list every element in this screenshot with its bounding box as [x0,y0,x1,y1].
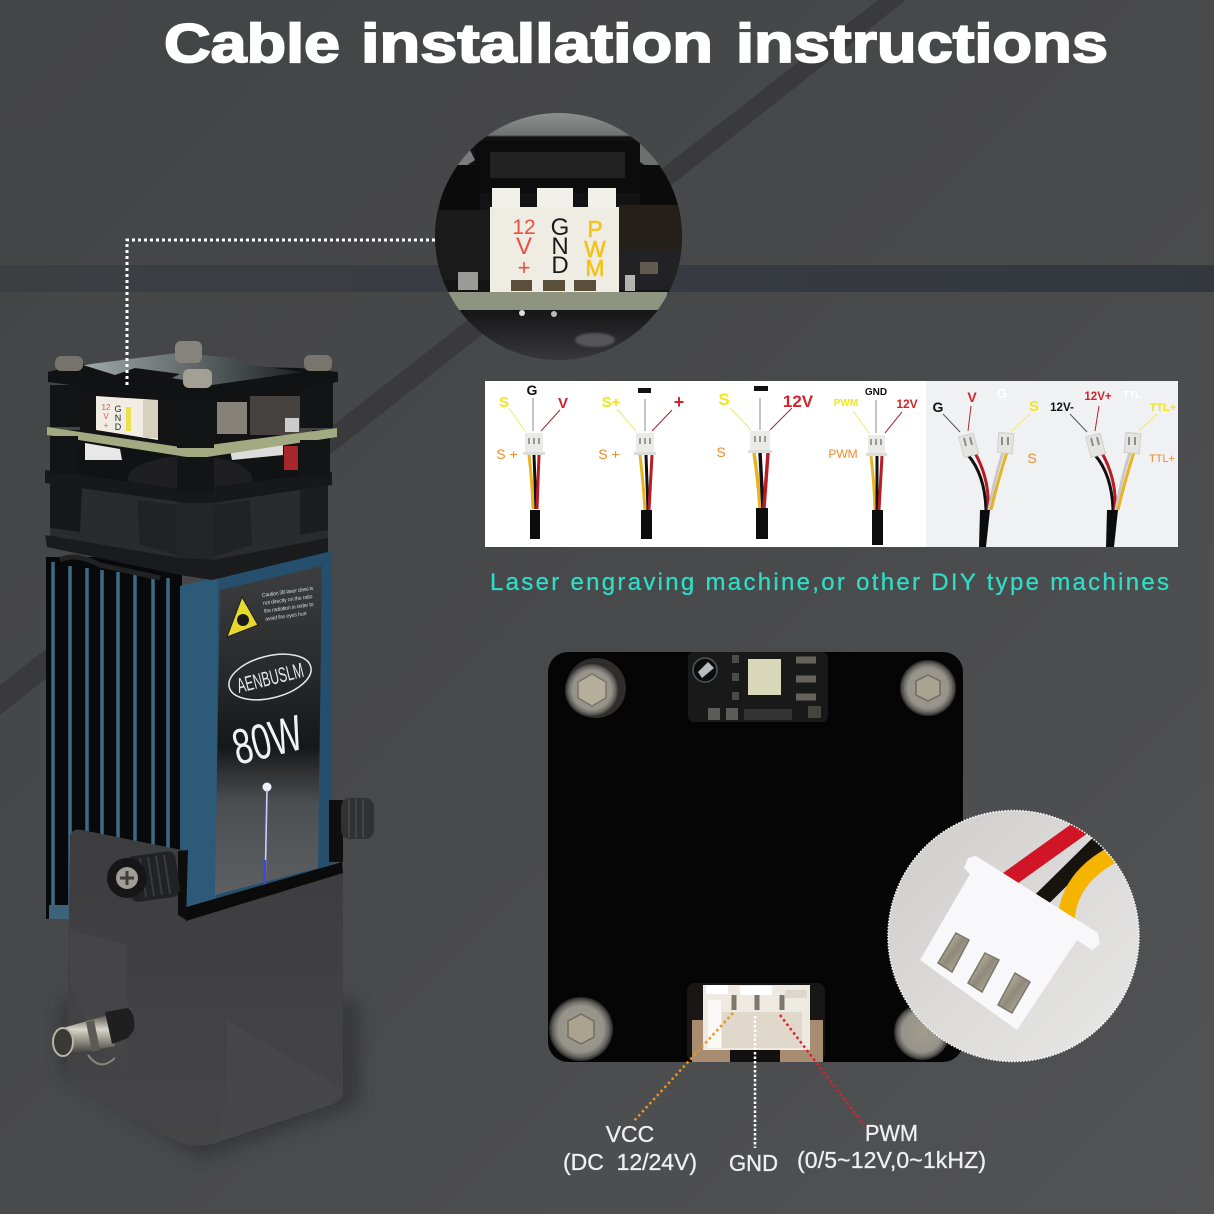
VCC spec: (DC 12/24V) [563,1149,697,1175]
12V+ print: 12 [512,216,536,239]
board connector: G [114,404,122,414]
cable pair 6 labels: TTL [1123,390,1141,401]
fan hub and gap [45,430,332,503]
board connector: + [104,421,109,430]
cable 3 labels: S [718,390,730,409]
board connector: V [103,412,109,421]
12V+ print: V [516,233,532,260]
GND print: N [551,233,569,260]
board connector: N [115,413,121,423]
cable pair 5 labels: G [933,399,944,415]
cable 3 labels: 12V [783,392,814,411]
right thumb screw [329,798,374,862]
cable 2 labels: S+ [602,394,621,411]
cooling fan [45,470,328,580]
cable 3 labels [716,386,814,460]
board connector [96,396,158,440]
subtitle: Laser engraving machine,or other DIY type machines [490,569,1169,596]
plate screws [55,341,332,388]
laser beam [262,782,272,897]
controller board photo [548,652,963,1062]
cable pair 6 labels: 12V+ [1084,391,1112,403]
warning text: avoid the eyes hurt [265,611,308,623]
circuit board [47,384,337,457]
GND dotted leader [754,1016,756,1148]
cable 1 labels: S [499,394,509,411]
cable 1 labels: V [558,395,568,412]
housing shadow [60,1000,360,1160]
12V+ print: + [518,255,530,280]
cable 4 labels: GND [865,387,887,398]
warning and power label [215,566,322,897]
cable pair 6 labels [1050,390,1176,465]
cable 1 [509,398,560,539]
body front [180,550,332,918]
cable 2 [617,399,672,539]
PWM dotted leader [780,1015,864,1125]
screw bottom left [549,997,613,1061]
cable 4 labels: PWM [834,398,858,409]
cable 4 labels: 12V [896,397,918,411]
wiring diagram panel [485,381,1178,547]
left thumb screw [107,850,181,903]
cable 4 labels: PWM [828,447,858,461]
lower housing [67,830,343,1146]
inductor and capacitor [217,396,312,435]
circle dotted edge [888,810,1139,1062]
callout leader dotted line [127,240,438,385]
icon: laser warning [227,597,258,637]
VCC label: VCC [606,1121,654,1147]
warning text: not directly on the ratio [263,594,313,607]
heatsink fins [46,557,182,919]
cable pair 6 [1070,406,1157,547]
cable pair 6 labels: 12V- [1050,402,1074,414]
cable pair 5 labels: S [1029,398,1039,415]
connector close-up circle [430,113,690,360]
PWM spec: (0/5~12V,0~1kHZ) [797,1147,986,1173]
PWM print: P [587,216,603,242]
water nozzle [53,1008,134,1064]
title: instructions [736,12,1108,74]
top plate [48,353,338,400]
title: installation [361,12,713,74]
laser module [45,341,374,1160]
cable 1 labels [496,382,568,462]
cable 1 labels: G [527,382,538,398]
connector housing [920,856,1100,1030]
VCC dotted leader [633,1013,733,1122]
cable 2 labels [598,388,684,462]
cable 1 labels: S + [496,446,518,462]
wires [1005,824,1112,925]
cable 4 labels [828,387,918,461]
cable pair 6 labels: TTL+ [1150,402,1176,414]
power rating: 80W [227,704,309,776]
cable 2 labels: + [674,392,684,412]
connector pins [938,933,1030,1013]
GND print: D [551,252,569,279]
cable 3 labels: S [716,444,726,460]
cable 2 labels: S + [598,446,620,462]
board connector: D [115,422,122,432]
warning text: the radiation in order to [264,602,314,615]
cable 4 [853,400,902,545]
board connector: 12 [102,403,111,412]
GND label: GND [729,1150,778,1176]
GND print: G [551,214,569,241]
title: Cable [164,12,340,74]
cable pair 6 labels: TTL+ [1149,453,1175,465]
cable connector close-up circle [888,810,1140,1062]
PWM print: W [584,236,606,262]
cable pair 5 [943,406,1030,547]
connector socket [687,983,825,1062]
brand logo: AENBUSLM [235,659,306,698]
cable pair 5 labels [933,386,1039,466]
brand logo [224,646,316,708]
standoff posts [50,382,333,493]
screw top left [565,658,626,718]
cable pair 5 labels: V [967,389,977,405]
cable pair 5 labels: S [1027,450,1037,466]
screw bottom right [894,1004,950,1060]
PWM print: M [585,255,605,281]
board edge [448,292,668,310]
PWM label: PWM [865,1120,918,1146]
screw top right [900,660,956,716]
connector body [490,188,619,292]
top module [688,652,828,722]
warning text: Caution 3B laser class is [261,586,314,599]
cable pair 5 labels: G [997,386,1007,401]
cable 3 [730,398,792,539]
